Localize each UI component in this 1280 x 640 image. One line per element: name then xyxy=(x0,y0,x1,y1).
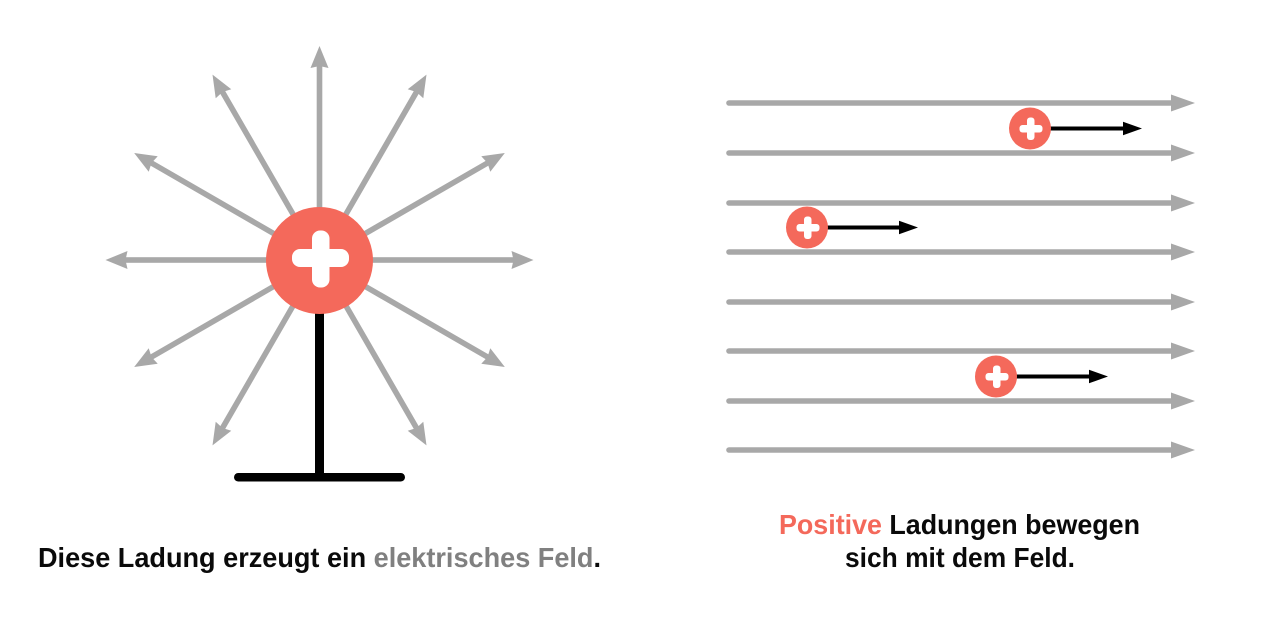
right caption: Positive Ladungen bewegen xyxy=(779,509,1140,540)
radial field arrows xyxy=(106,46,534,450)
icon: large positive charge xyxy=(266,207,373,314)
panel: point charge with radial field xyxy=(106,46,534,482)
right caption: sich mit dem Feld. xyxy=(845,542,1075,573)
charge with motion arrow: middle xyxy=(786,206,918,248)
charge with motion arrow: top xyxy=(1009,108,1142,150)
parallel field lines xyxy=(729,94,1195,458)
panel: uniform field with moving charges xyxy=(729,94,1195,458)
left caption: Diese Ladung erzeugt ein elektrisches Feld. xyxy=(38,542,601,573)
charge with motion arrow: bottom xyxy=(975,356,1108,398)
right caption xyxy=(779,509,1140,573)
charge stand xyxy=(234,305,405,482)
